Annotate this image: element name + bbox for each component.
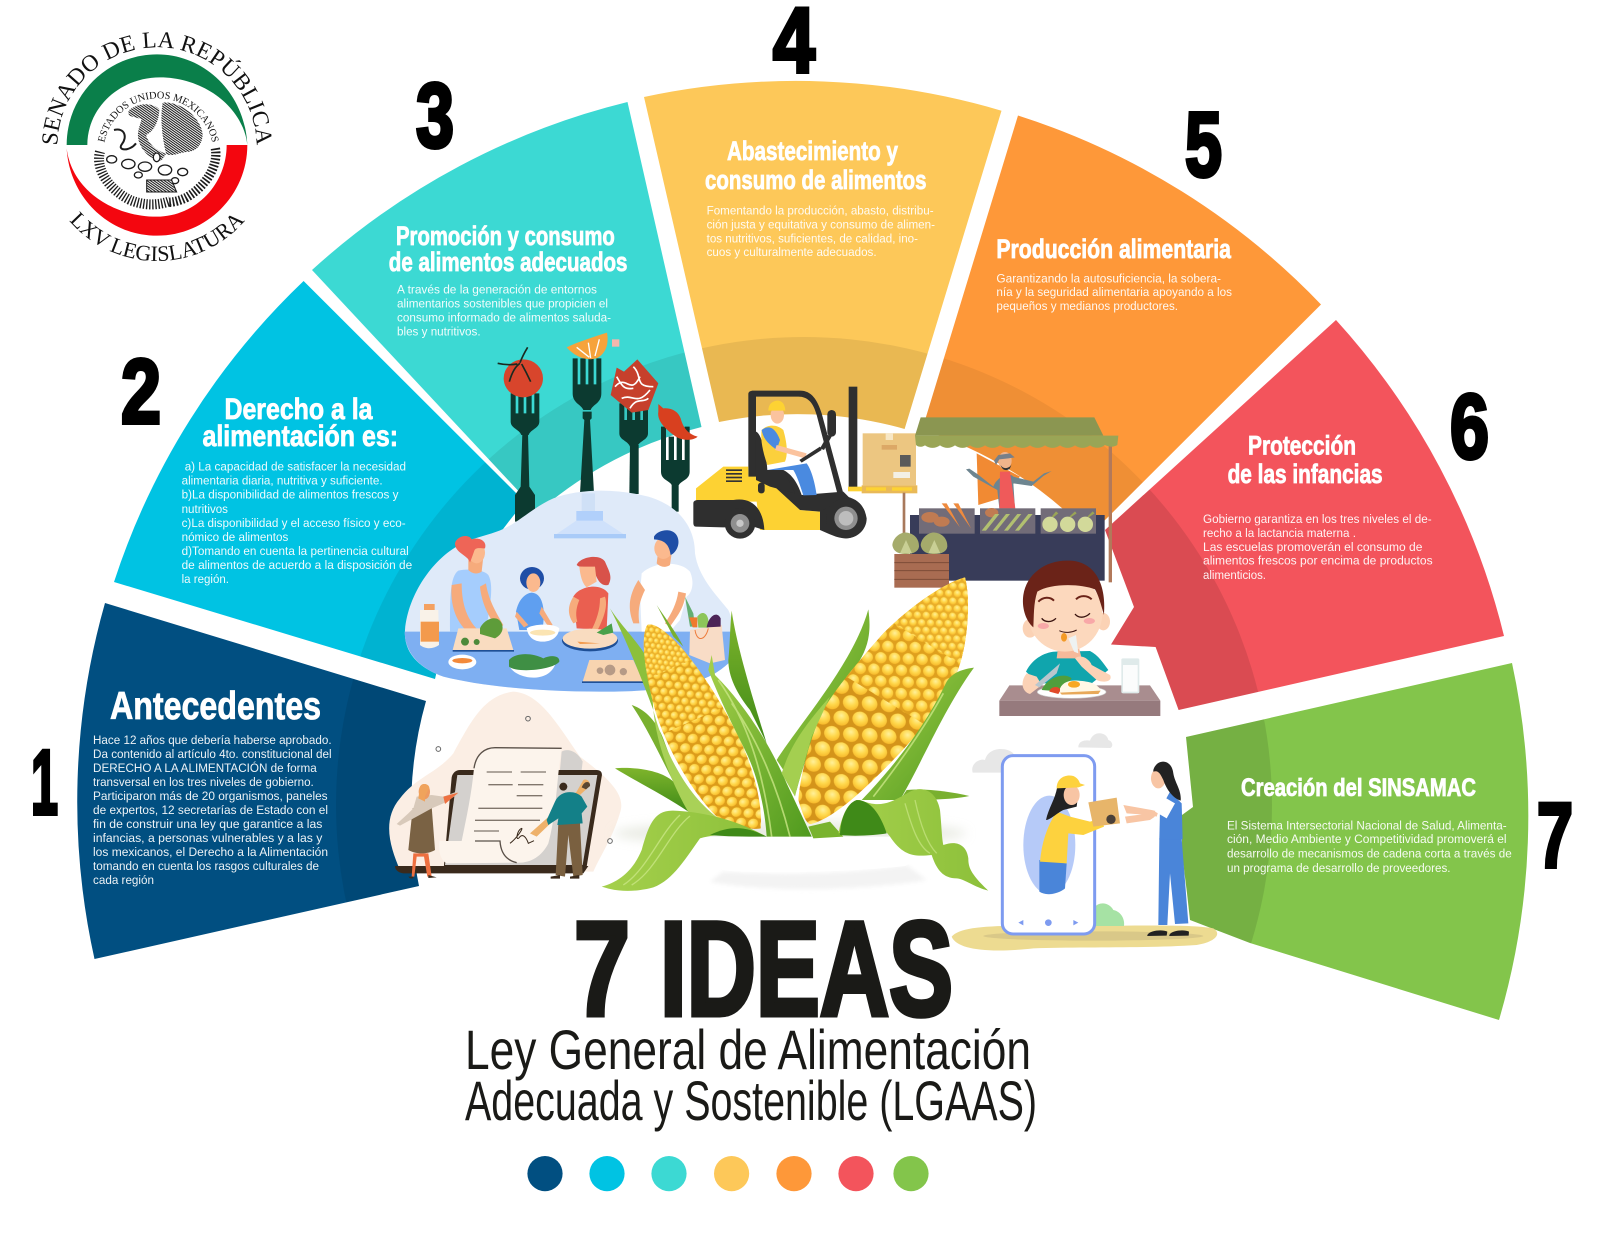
girl xyxy=(569,557,610,635)
left ear of corn xyxy=(644,624,761,829)
body text 3: alimentarios sostenibles que propicien el xyxy=(397,296,608,310)
beige blob xyxy=(389,692,621,872)
illustration: boy eating xyxy=(999,561,1160,716)
body text 4: Fomentando la producción, abasto, distribu- xyxy=(707,203,934,217)
wedge 7 xyxy=(1182,663,1528,1020)
body text 3 xyxy=(397,282,611,338)
table xyxy=(405,632,734,692)
number 3: 3 xyxy=(416,65,454,167)
body text 7 xyxy=(1227,818,1512,875)
ground xyxy=(952,926,1217,951)
heading 3: Promoción y consumo xyxy=(396,221,615,251)
body text 2: nómico de alimentos xyxy=(182,530,288,544)
wedge 3 xyxy=(312,102,702,512)
glass of milk xyxy=(1121,658,1139,693)
customer xyxy=(1123,762,1189,936)
illustration: market stall xyxy=(892,417,1118,588)
body text 7: ción, Medio Ambiente y Competitividad promoverá el xyxy=(1227,832,1507,846)
panel 7: Creación del SINSAMAC xyxy=(1182,663,1528,1020)
vendor xyxy=(966,452,1052,508)
forklift cab frame xyxy=(748,391,843,493)
fork 3 with meat xyxy=(611,359,658,494)
heading 7: Creación del SINSAMAC xyxy=(1241,774,1476,802)
legend dots xyxy=(527,1156,929,1191)
logo legislature text: LXV LEGISLATURA xyxy=(70,211,245,261)
body text 6: Gobierno garantiza en los tres niveles el de- xyxy=(1203,512,1432,526)
wedge 6 xyxy=(1105,320,1504,710)
panel 2: Derecho a la alimentación xyxy=(114,281,525,679)
body text 1: Participaron más de 20 organismos, paneles xyxy=(93,789,328,803)
body text 3: A través de la generación de entornos xyxy=(397,282,597,296)
oval xyxy=(1023,796,1075,894)
body text 2: de alimentos de acuerdo a la disposición de xyxy=(182,558,412,572)
body text 3: consumo informado de alimentos saluda- xyxy=(397,311,611,325)
woman xyxy=(450,536,503,635)
heading 4: consumo de alimentos xyxy=(705,165,926,195)
kitchen blob xyxy=(405,491,733,692)
right draping leaf xyxy=(838,789,988,891)
left draping leaf xyxy=(602,811,767,891)
seat xyxy=(756,432,795,493)
bush xyxy=(1093,903,1124,926)
arc: green xyxy=(67,54,247,145)
courier xyxy=(1039,776,1120,894)
heading 6 xyxy=(1228,431,1383,489)
numbers xyxy=(31,0,1573,887)
body text 5: pequeños y medianos productores. xyxy=(996,299,1178,313)
fork 4 with chili xyxy=(658,404,698,512)
right ear of corn xyxy=(798,577,968,824)
illustration: corn xyxy=(602,570,993,891)
corn shadow xyxy=(613,821,967,889)
driver xyxy=(761,401,822,495)
heading 3 xyxy=(389,221,628,277)
awning xyxy=(915,417,1118,448)
child xyxy=(515,567,553,630)
body text 4: tos nutritivos, suficientes, de calidad, ino- xyxy=(707,232,918,246)
body text 4: ción justa y equitativa y consumo de alimen- xyxy=(707,217,935,231)
body text 5: nía y la seguridad alimentaria apoyando a los xyxy=(996,285,1232,299)
body text 5 xyxy=(996,271,1232,313)
panel 3: Promoción y consumo xyxy=(312,102,702,512)
heading 2: alimentación es: xyxy=(202,420,398,453)
body text 2: nutritivos xyxy=(182,502,228,516)
body text 1: DERECHO A LA ALIMENTACIÓN de forma xyxy=(93,760,317,775)
table items xyxy=(420,604,645,683)
forklift body xyxy=(693,467,867,539)
heading 4 xyxy=(705,136,926,195)
heading 3: de alimentos adecuados xyxy=(389,247,628,277)
man with pen xyxy=(530,780,590,879)
body text 6: alimenticios. xyxy=(1203,568,1266,582)
body text 7: un programa de desarrollo de proveedores. xyxy=(1227,861,1450,875)
stall posts xyxy=(903,493,905,533)
body text 6: Las escuelas promoverán el consumo de xyxy=(1203,540,1423,554)
number 2: 2 xyxy=(121,341,161,443)
phone xyxy=(1002,756,1095,934)
panel 4: Abastecimiento xyxy=(644,81,1002,429)
cargo box xyxy=(848,433,917,493)
white bowl xyxy=(676,837,919,872)
heading 2 xyxy=(202,393,398,453)
heading 1: Antecedentes xyxy=(110,685,321,728)
decorative circles xyxy=(436,716,612,843)
logo inner text: ESTADOS UNIDOS MEXICANOS xyxy=(98,92,219,142)
body text 1: Da contenido al artículo 4to. constitucional del xyxy=(93,747,332,761)
title: 7 IDEAS: 7 xyxy=(574,895,630,1044)
number 7: 7 xyxy=(1537,785,1573,887)
number 5: 5 xyxy=(1185,94,1222,196)
panel 5: Producción alimentaria xyxy=(922,116,1321,535)
fork 2 with orange xyxy=(567,333,619,493)
clouds xyxy=(972,733,1112,773)
body text 2 xyxy=(182,460,412,586)
body text 4: cuos y culturalmente adecuados. xyxy=(707,245,877,259)
body text 1: fin de construir una ley que garantice a las xyxy=(93,817,322,831)
body text 2: d)Tomando en cuenta la pertinencia cultural xyxy=(182,544,409,558)
body text 2: a) La capacidad de satisfacer la necesidad xyxy=(185,460,406,474)
arms and cutlery xyxy=(1023,635,1111,694)
body text 6: recho a la lactancia materna . xyxy=(1203,526,1356,540)
heading 6: de las infancias xyxy=(1228,459,1383,489)
title: 7 IDEAS xyxy=(574,895,953,1044)
logo: Senado de la República xyxy=(42,32,272,261)
laptop xyxy=(395,770,602,873)
woman figure xyxy=(397,784,458,878)
shirt xyxy=(1026,651,1108,683)
body text 1: de expertos, 12 secretarías de Estado con el xyxy=(93,803,328,817)
body text 6: alimentos frescos por encima de productos xyxy=(1203,554,1433,568)
icon: national eagle seal xyxy=(99,103,216,204)
table xyxy=(999,685,1160,716)
wedge 4 xyxy=(644,81,1002,429)
illustration: delivery on phone xyxy=(952,733,1217,951)
grocery bag xyxy=(685,597,725,663)
heading 5: Producción alimentaria xyxy=(996,234,1232,264)
wedge 1 xyxy=(77,603,426,959)
body text 1: los mexicanos, el Derecho a la Alimentación xyxy=(93,845,328,859)
man xyxy=(630,530,692,632)
produce bins xyxy=(919,503,1096,534)
kitchen hood xyxy=(554,493,626,538)
body text 2: alimentaria diaria, nutritiva y suficiente. xyxy=(182,474,383,488)
number 6: 6 xyxy=(1450,376,1489,478)
stall counter xyxy=(910,515,1105,581)
body text 1: tomando en cuenta los rasgos culturales de xyxy=(93,859,319,873)
body text 1: infancias, a personas vulnerables y a las y xyxy=(93,831,323,845)
illustration: document signing xyxy=(389,692,621,879)
wedge 2 xyxy=(114,281,525,679)
title: 7 IDEAS: IDEAS xyxy=(660,895,953,1044)
crate with cabbages xyxy=(892,533,949,588)
arc: red xyxy=(67,145,247,236)
illustration: forks with food xyxy=(498,333,698,522)
illustration: family cooking xyxy=(405,491,734,692)
subtitle: Adecuada y Sostenible (LGAAS) xyxy=(465,1069,1037,1132)
paper scroll xyxy=(439,748,583,863)
body text 2: la región. xyxy=(182,572,229,586)
illustration: forklift xyxy=(693,387,917,539)
body text 1: transversal en los tres niveles de gobierno. xyxy=(93,775,314,789)
heading 2: Derecho a la xyxy=(224,393,373,426)
head xyxy=(1023,561,1110,658)
body text 1 xyxy=(93,733,332,887)
body text 1: Hace 12 años que debería haberse aprobado. xyxy=(93,733,332,747)
body text 2: b)La disponibilidad de alimentos frescos y xyxy=(182,488,399,502)
panel 1: Antecedentes xyxy=(77,603,426,959)
forklift mast xyxy=(849,387,857,488)
body text 4 xyxy=(707,203,935,259)
body text 5: Garantizando la autosuficiencia, la sobera- xyxy=(996,271,1221,285)
body text 1: cada región xyxy=(93,873,154,887)
body text 3: bles y nutritivos. xyxy=(397,324,481,338)
orange backdrop xyxy=(977,453,1020,505)
number 1: 1 xyxy=(31,732,58,834)
panel 6: Protección de las infancias xyxy=(1105,320,1504,710)
wrapping leaves xyxy=(653,655,974,838)
plate of food xyxy=(1037,676,1106,698)
body text 6 xyxy=(1203,512,1433,582)
heading 4: Abastecimiento y xyxy=(727,136,898,166)
wedge 5 xyxy=(922,116,1321,535)
heading 6: Protección xyxy=(1248,431,1356,461)
logo ring text: SENADO DE LA REPÚBLICA xyxy=(42,32,272,146)
subtitle xyxy=(465,1018,1037,1132)
body text 2: c)La disponibilidad y el acceso físico y eco- xyxy=(182,516,406,530)
body text 7: El Sistema Intersectorial Nacional de Salud, Alimenta- xyxy=(1227,818,1507,832)
phone nav icons xyxy=(1018,919,1078,926)
subtitle: Ley General de Alimentación xyxy=(465,1018,1031,1081)
back leaves xyxy=(610,605,969,812)
fork 1 with tomato xyxy=(498,347,543,522)
body text 7: desarrollo de mecanismos de cadena corta a través de xyxy=(1227,846,1512,860)
